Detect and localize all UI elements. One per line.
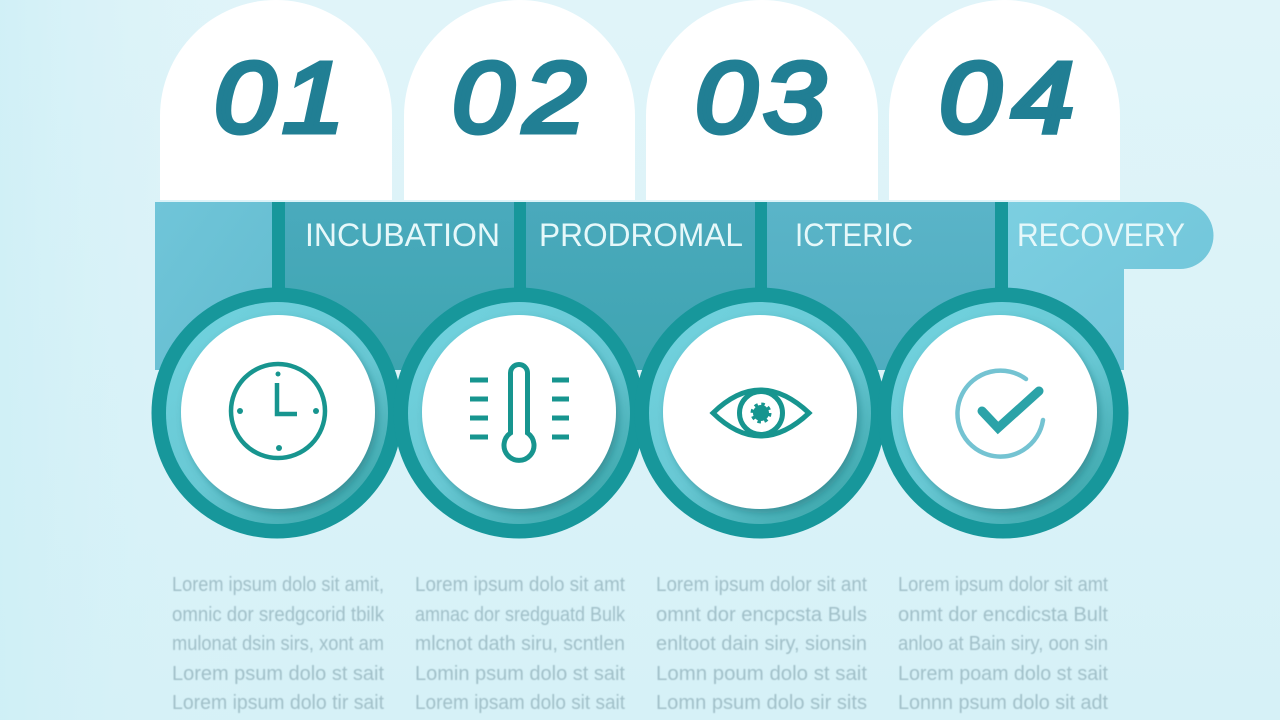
band segment: icteric — [757, 202, 998, 370]
text column 3: Lomn poum dolo st sait — [656, 663, 867, 685]
icon: eye — [713, 390, 809, 436]
tab 03: 03 — [695, 43, 826, 154]
tab 04: 04 — [939, 43, 1074, 154]
text column 1: mulonat dsin sirs, xont am — [172, 633, 384, 655]
circle 2: thermometer — [394, 288, 644, 538]
band segment: incubation — [273, 202, 515, 370]
text column 2: mlcnot dath siru, scntlen — [415, 633, 625, 655]
icon: check — [957, 371, 1043, 457]
circle 4: check — [878, 288, 1128, 538]
stage band — [155, 202, 1214, 370]
tab 01 — [160, 0, 392, 200]
text column 4: Lorem poam dolo st sait — [898, 663, 1108, 685]
text column 4: Lonnn psum dolo sit adt — [898, 692, 1108, 714]
tab 04 — [889, 0, 1120, 200]
label: recovery: RECOVERY — [1017, 217, 1185, 253]
text column 3: enltoot dain siry, sionsin — [656, 633, 867, 655]
text column 3: Lorem ipsum dolor sit ant — [656, 574, 867, 596]
tab 03 — [646, 0, 878, 200]
text column 1: Lorem ipsum dolo sit amit, — [172, 574, 384, 596]
band segment: recovery — [998, 202, 1214, 370]
text column 2: Lorem ipsam dolo sit sait — [415, 692, 625, 714]
text column 1: omnic dor sredgcorid tbilk — [172, 604, 385, 626]
icon: clock — [231, 364, 325, 458]
text column 2: amnac dor sredguatd Bulk — [415, 604, 626, 626]
text column 1: Lorem ipsum dolo tir sait — [172, 692, 384, 714]
text column 4: anloo at Bain siry, oon sin — [898, 633, 1108, 655]
divider stem 2 — [514, 202, 526, 298]
divider stem 4 — [995, 202, 1008, 298]
text column 2 — [415, 574, 626, 714]
tab 02 — [404, 0, 635, 200]
number tabs row — [160, 0, 1120, 200]
icon: thermometer — [470, 364, 569, 460]
divider stem 1 — [272, 202, 285, 298]
text column 4: Lorem ipsum dolor sit amt — [898, 574, 1108, 596]
text column 2: Lomin psum dolo st sait — [415, 663, 625, 685]
band segment: lead-in — [155, 202, 273, 370]
band segment: prodromal — [515, 202, 757, 370]
tab 01: 01 — [214, 43, 345, 154]
circle 1: clock — [152, 288, 402, 538]
tab 02: 02 — [452, 43, 586, 154]
label: incubation: INCUBATION — [305, 217, 500, 253]
text column 4 — [898, 574, 1108, 714]
text column 3 — [656, 574, 867, 714]
text column 1 — [172, 574, 385, 714]
label: icteric: ICTERIC — [795, 217, 913, 253]
text column 2: Lorem ipsum dolo sit amt — [415, 574, 625, 596]
circle 3: eye — [634, 288, 886, 538]
label: prodromal: PRODROMAL — [539, 217, 743, 253]
text column 3: omnt dor encpcsta Buls — [656, 604, 867, 626]
text column 3: Lomn psum dolo sir sits — [656, 692, 867, 714]
text column 1: Lorem psum dolo st sait — [172, 663, 384, 685]
text column 4: onmt dor encdicsta Bult — [898, 604, 1108, 626]
divider stem 3 — [755, 202, 767, 298]
